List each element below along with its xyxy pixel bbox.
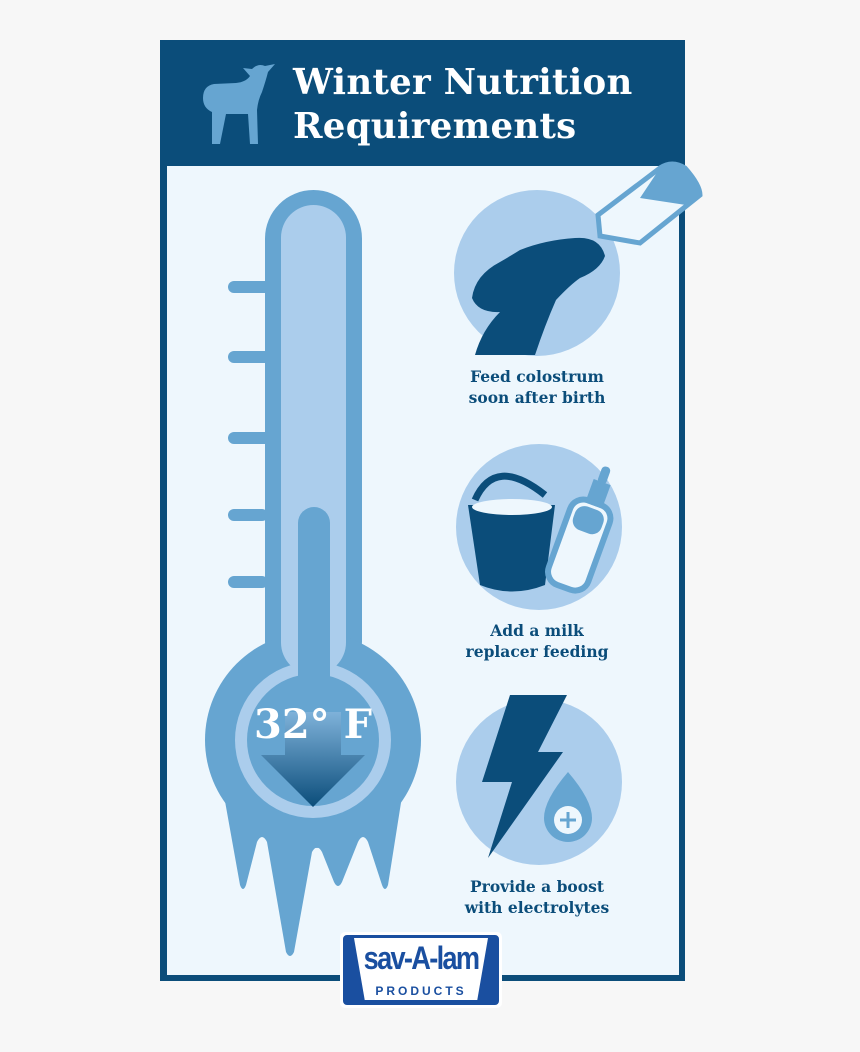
text: milk replacer: replacer feeding [466,642,608,661]
text: feed colostrum: Feed colostrum [470,367,604,386]
text: milk replacer [466,621,608,661]
icon: bucket and bottle [456,444,627,610]
text: electrolytes [464,877,609,917]
text: feed colostrum: soon after birth [469,388,605,407]
text: electrolytes: with electrolytes [465,898,609,917]
thermometer [205,190,421,956]
title: Requirements [293,106,576,147]
text: electrolytes: Provide a boost [470,877,604,896]
logo: sav-A-lam [364,940,478,976]
title: Winter Nutrition [293,62,633,103]
thermometer: 32° F [254,701,372,748]
logo [340,932,502,1008]
text: feed colostrum [469,367,606,407]
inner panel [167,166,679,975]
logo: PRODUCTS [375,984,467,998]
icon: lamb [203,64,275,144]
icon: lamb feeding [454,164,700,356]
title [292,62,633,147]
icon: lightning and electrolyte drop [456,695,622,865]
text: milk replacer: Add a milk [490,621,584,640]
frame [160,40,685,981]
